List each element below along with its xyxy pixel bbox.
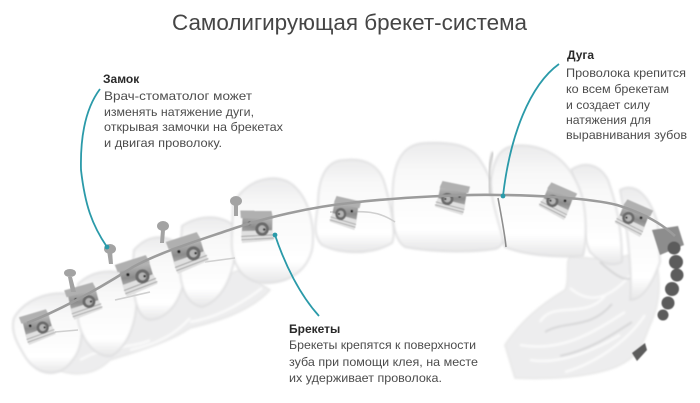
callout: brackets	[289, 322, 478, 385]
callout: lock: Замок	[103, 72, 140, 86]
tooth: premolar 1	[78, 271, 136, 356]
callout: brackets: Брекеты	[289, 322, 340, 336]
callout: brackets: Брекеты крепятся к поверхности	[289, 338, 476, 352]
callout: arch wire: Дуга	[567, 48, 594, 62]
callout: arch wire: ко всем брекетам	[566, 82, 669, 96]
callout: lock: и двигая проволоку.	[104, 136, 222, 150]
lingual gum side of the left teeth	[45, 270, 270, 374]
tooth: molar far left	[13, 293, 82, 373]
callout: brackets: зуба при помощи клея, на месте	[289, 355, 478, 369]
callout: arch wire: натяжения для	[566, 113, 651, 127]
arch wire	[27, 195, 675, 323]
back molars and gum on the right	[505, 165, 660, 378]
callout: lock: изменять натяжение дуги,	[104, 105, 254, 119]
brackets	[18, 181, 654, 346]
ligature band across teeth	[55, 211, 395, 332]
callout: lock: открывая замочки на брекетах	[104, 120, 283, 134]
tooth: central incisor right	[491, 145, 586, 257]
callout: lock	[103, 72, 283, 150]
callout: lock: Врач-стоматолог может	[104, 89, 253, 103]
callout: arch wire: и создает силу	[566, 98, 650, 112]
leader line: lock	[81, 89, 109, 249]
leader line: arch wire	[501, 64, 559, 198]
hook pins on brackets	[64, 196, 242, 292]
leader line: brackets	[273, 233, 319, 316]
callout: arch wire: Проволока крепится	[566, 66, 686, 80]
tooth: central incisor left	[392, 143, 504, 251]
tooth: lateral incisor left	[316, 160, 394, 252]
callout: brackets: их удерживает проволока.	[289, 371, 442, 385]
title: Самолигирующая брекет-система	[172, 10, 528, 35]
teeth row	[13, 143, 586, 373]
illustration: dental arch with braces	[13, 143, 684, 378]
callout: arch wire	[566, 48, 687, 142]
tooth: canine	[232, 178, 313, 283]
molar brackets on the far right	[632, 226, 684, 361]
tooth gaps	[498, 198, 506, 247]
callout: arch wire: выравнивания зубов	[566, 128, 687, 142]
tooth: premolar 3	[180, 217, 235, 307]
tooth: premolar 2	[133, 237, 185, 320]
